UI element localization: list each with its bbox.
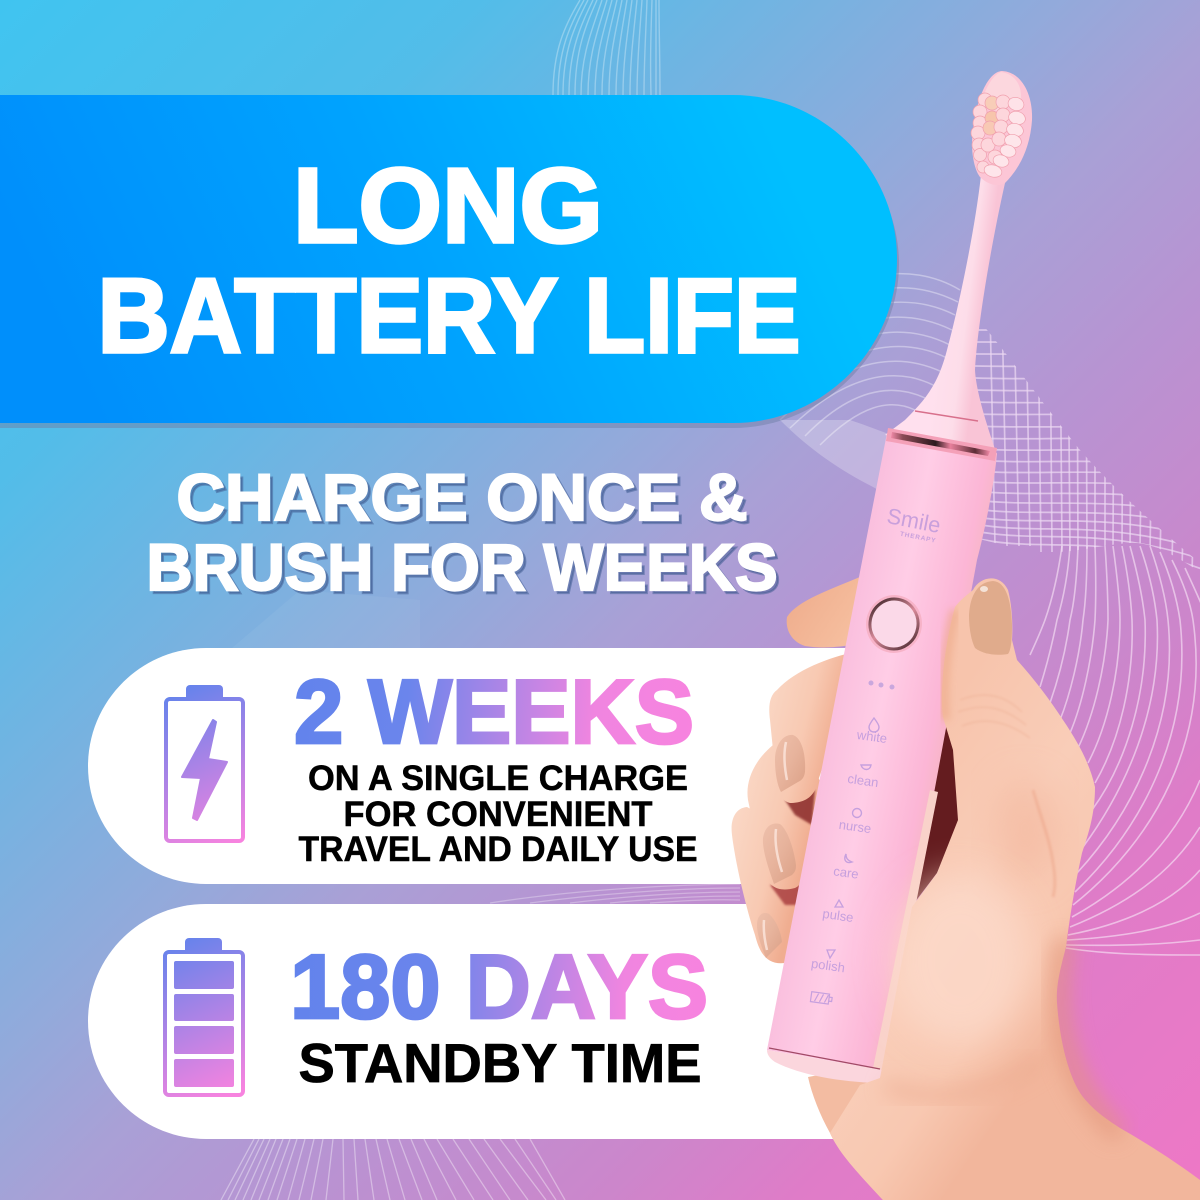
palm shading: wrist edge xyxy=(1059,940,1120,1135)
icon: full battery xyxy=(165,938,243,1095)
hand base under brush xyxy=(808,1060,900,1200)
ring finger xyxy=(747,745,825,889)
background arcs: right xyxy=(1030,546,1200,955)
mode: clean: clean xyxy=(847,771,880,790)
banner pill xyxy=(0,95,897,423)
handle right edge xyxy=(873,790,938,1070)
stat: 180 days: 180 DAYS xyxy=(290,937,708,1038)
hand: thumb and palm in front xyxy=(830,578,1200,1200)
subheading line 1: CHARGE ONCE & xyxy=(176,460,748,534)
headline banner xyxy=(0,95,899,428)
nail: middle finger xyxy=(775,735,805,792)
shadow gap between brush and palm xyxy=(900,722,962,915)
subheading line 1 shadow: CHARGE ONCE & xyxy=(180,463,750,537)
background wave: top centre xyxy=(553,0,660,95)
middle finger xyxy=(769,652,855,803)
background lines between panels xyxy=(490,884,740,903)
icon: battery with bolt xyxy=(166,685,243,841)
knuckle shading xyxy=(995,780,1055,880)
thumb nail highlight xyxy=(980,586,988,592)
metallic collar xyxy=(886,428,997,461)
nail: ring finger xyxy=(763,824,796,884)
mode: pulse: pulse xyxy=(822,906,855,925)
mode: white xyxy=(855,718,888,746)
little finger xyxy=(732,807,810,963)
thumb nail xyxy=(969,581,1012,655)
thumb shading xyxy=(944,610,955,720)
palm shading: crease near knuckle xyxy=(1033,790,1055,897)
faint light band behind subheading xyxy=(232,590,420,648)
bristles xyxy=(971,72,1027,179)
palm shading: heel highlight xyxy=(890,875,1030,1045)
index finger xyxy=(787,576,880,647)
mode: white: white xyxy=(855,727,888,746)
panel: 180 days xyxy=(88,904,860,1139)
mode: care xyxy=(833,854,860,882)
mode: nurse: nurse xyxy=(838,817,872,836)
nail: little finger xyxy=(757,913,782,958)
headline: BATTERY LIFE: BATTERY LIFE xyxy=(98,257,800,375)
stat: 2 weeks: 2 WEEKS xyxy=(294,662,694,763)
description line 3: TRAVEL AND DAILY USE xyxy=(298,830,698,869)
panel: 2 weeks xyxy=(88,648,860,884)
shadow under middle finger xyxy=(785,790,815,825)
subheading line 2: BRUSH FOR WEEKS xyxy=(146,530,778,604)
subheading xyxy=(146,460,780,607)
description line 2: FOR CONVENIENT xyxy=(344,795,652,834)
hand: fingers behind brush xyxy=(732,576,900,1200)
pill background xyxy=(88,648,860,884)
bottom cap xyxy=(767,1050,883,1083)
pill background xyxy=(88,904,860,1139)
brush head xyxy=(972,71,1032,185)
palm shading: lower crease xyxy=(885,1060,1040,1095)
description: STANDBY TIME xyxy=(298,1032,702,1094)
logo: Smile xyxy=(885,503,943,538)
background wave: left of brush xyxy=(780,274,975,545)
nail highlights xyxy=(764,742,787,950)
description line 1: ON A SINGLE CHARGE xyxy=(308,759,688,798)
mode: care: care xyxy=(833,863,860,882)
handle body xyxy=(767,433,997,1070)
bottom cap seam xyxy=(769,1048,880,1069)
toothbrush xyxy=(767,71,1032,1083)
shadow under ring finger xyxy=(770,880,800,905)
background fan: bottom centre xyxy=(221,1139,565,1200)
icon: small battery xyxy=(810,992,833,1004)
mode: polish: polish xyxy=(810,956,846,975)
banner shadow xyxy=(0,100,899,428)
background mesh: right xyxy=(975,310,1200,575)
mode: nurse xyxy=(838,808,872,836)
indicator dots xyxy=(868,680,894,690)
neck seam xyxy=(915,411,978,421)
power button xyxy=(861,591,927,657)
brush neck xyxy=(885,175,1005,455)
palm silhouette xyxy=(830,578,1200,1200)
subheading line 2 shadow: BRUSH FOR WEEKS xyxy=(150,533,780,607)
thumb joint creases xyxy=(958,695,1030,738)
headline: LONG: LONG xyxy=(293,147,603,265)
logo: THERAPY xyxy=(899,531,937,545)
